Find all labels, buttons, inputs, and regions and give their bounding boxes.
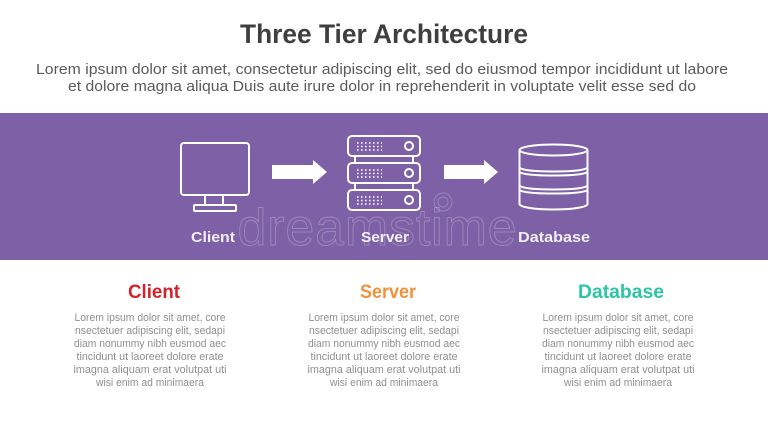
text block: server description	[308, 312, 460, 389]
text block: database description: diam nonummy nibh eusmod aec	[542, 338, 694, 350]
text block: server description: imagna aliquam erat volutpat uti	[308, 364, 460, 376]
text block: database description: nsectetuer adipiscing elit, sedapi	[543, 325, 693, 337]
heading: database: Database	[578, 282, 664, 303]
text block: server description: Lorem ipsum dolor sit amet, core	[308, 312, 460, 324]
text block: database description: Lorem ipsum dolor sit amet, core	[542, 312, 694, 324]
subtitle text block: et dolore magna aliqua Duis aute irure dolor in reprehenderit in voluptate velit esse sed do	[68, 78, 696, 95]
text block: client description: nsectetuer adipiscing elit, sedapi	[75, 325, 225, 337]
panel: client column	[74, 282, 226, 389]
subtitle text block	[36, 61, 728, 95]
text block: server description: wisi enim ad minimaera	[329, 377, 439, 389]
text block: client description: diam nonummy nibh eusmod aec	[74, 338, 226, 350]
title: Three Tier Architecture	[240, 19, 528, 49]
text block: server description: nsectetuer adipiscing elit, sedapi	[309, 325, 459, 337]
text block: database description	[542, 312, 694, 389]
text block: server description: diam nonummy nibh eusmod aec	[308, 338, 460, 350]
text block: database description: tincidunt ut laoreet dolore erate	[544, 351, 692, 363]
text block: client description: Lorem ipsum dolor sit amet, core	[74, 312, 226, 324]
text block: server description: tincidunt ut laoreet dolore erate	[310, 351, 458, 363]
arrow: client to server	[272, 160, 327, 184]
text block: client description: wisi enim ad minimaera	[95, 377, 205, 389]
panel: database column	[542, 282, 694, 389]
label: server: Server	[361, 229, 409, 246]
label: database: Database	[518, 229, 590, 246]
text block: client description: tincidunt ut laoreet dolore erate	[76, 351, 224, 363]
text block: database description: wisi enim ad minimaera	[563, 377, 673, 389]
label: client: Client	[191, 229, 235, 246]
text block: client description	[74, 312, 226, 389]
watermark: dreamstime	[238, 199, 516, 257]
icon: database cylinder	[520, 144, 588, 210]
heading: server: Server	[360, 282, 417, 303]
panel: purple diagram band	[0, 113, 768, 260]
icon: server rack	[348, 136, 420, 210]
panel: server column	[308, 282, 460, 389]
arrow: server to database	[444, 160, 498, 184]
text block: client description: imagna aliquam erat volutpat uti	[74, 364, 226, 376]
subtitle text block: Lorem ipsum dolor sit amet, consectetur adipiscing elit, sed do eiusmod tempor incididunt ut labore	[36, 61, 728, 78]
text block: database description: imagna aliquam erat volutpat uti	[542, 364, 694, 376]
icon: client monitor	[181, 143, 249, 211]
heading: client: Client	[128, 282, 181, 303]
